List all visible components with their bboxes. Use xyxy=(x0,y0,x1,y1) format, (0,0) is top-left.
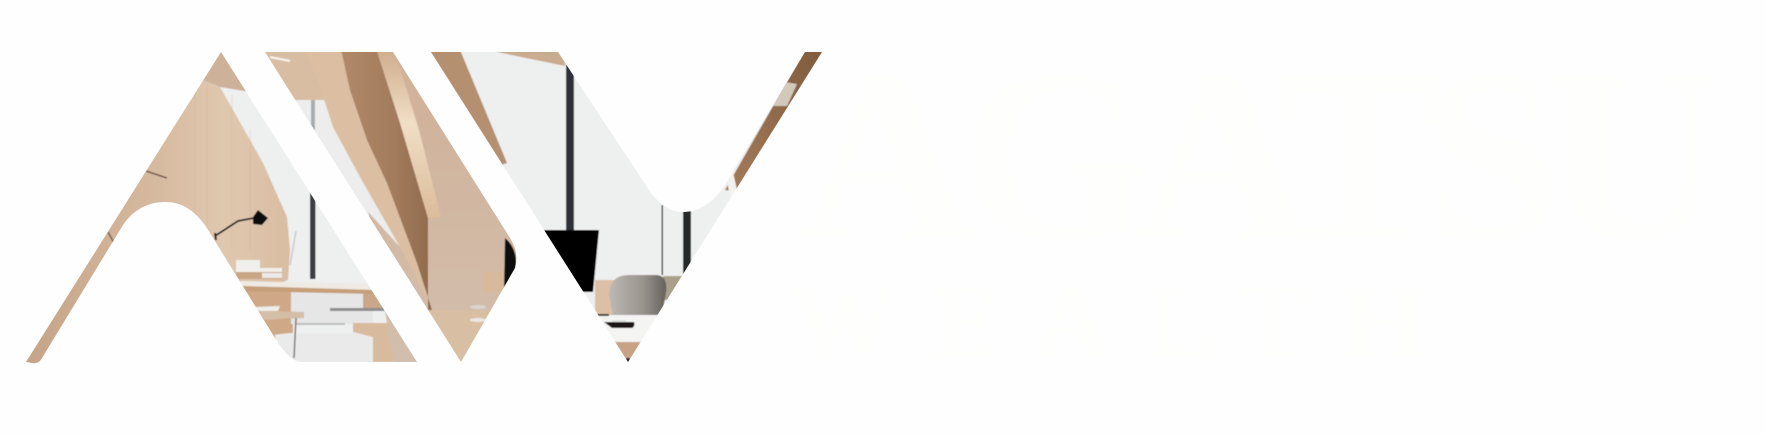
ceiling at A apex xyxy=(203,52,246,92)
pale window tip on stripe xyxy=(726,172,737,200)
stool xyxy=(254,306,304,358)
lamp xyxy=(215,210,268,240)
faint wordmark: near-invisible text xyxy=(790,20,1722,380)
window backdrop xyxy=(221,88,387,333)
books on shelf xyxy=(236,260,282,279)
top wood wedge xyxy=(496,52,566,66)
white table xyxy=(585,315,675,342)
glass base shadow bands xyxy=(295,308,388,325)
black chair back xyxy=(504,238,516,290)
foreground table xyxy=(352,322,394,362)
grey chair xyxy=(609,275,666,316)
glass base xyxy=(291,292,373,324)
brown right stripe xyxy=(725,45,830,192)
white window in middle piece xyxy=(363,184,400,246)
thin window line xyxy=(662,205,663,275)
floor xyxy=(274,332,293,342)
light beam face xyxy=(312,52,427,296)
tabletop middle xyxy=(447,322,474,362)
logo mark: AV monogram filled with an interior photo scene xyxy=(26,52,822,364)
middle diagonal piece: wall xyxy=(368,56,516,362)
dark window column xyxy=(566,62,574,232)
dark window column xyxy=(310,193,316,279)
ceiling downlight xyxy=(270,57,290,61)
grey mullion xyxy=(311,100,315,130)
wood behind chair xyxy=(595,280,615,315)
wall grain xyxy=(231,95,250,140)
left wood sliver xyxy=(431,52,508,165)
wordmark line one: AGATSU xyxy=(798,20,1722,291)
wordmark line two: WEALTH xyxy=(790,263,1426,380)
ceiling xyxy=(265,52,324,100)
thin screen edge xyxy=(290,231,296,265)
black object on table xyxy=(597,314,634,328)
left wood wall xyxy=(26,80,290,364)
beam highlight strip xyxy=(378,52,440,218)
wood under table xyxy=(585,342,665,364)
dark tip point xyxy=(626,358,630,363)
pale band on stripe xyxy=(773,82,797,106)
black monitor xyxy=(544,229,600,293)
dark window column right xyxy=(683,208,691,275)
small plates xyxy=(470,305,486,322)
desk top xyxy=(240,281,375,294)
dark beam face xyxy=(340,45,432,310)
wall cracks xyxy=(108,171,167,243)
right panel white backdrop xyxy=(460,52,530,208)
wooden ledge xyxy=(483,272,505,292)
wood behind desk right xyxy=(363,292,385,308)
patterned cushion xyxy=(663,276,685,300)
desk underside wood xyxy=(246,287,294,338)
